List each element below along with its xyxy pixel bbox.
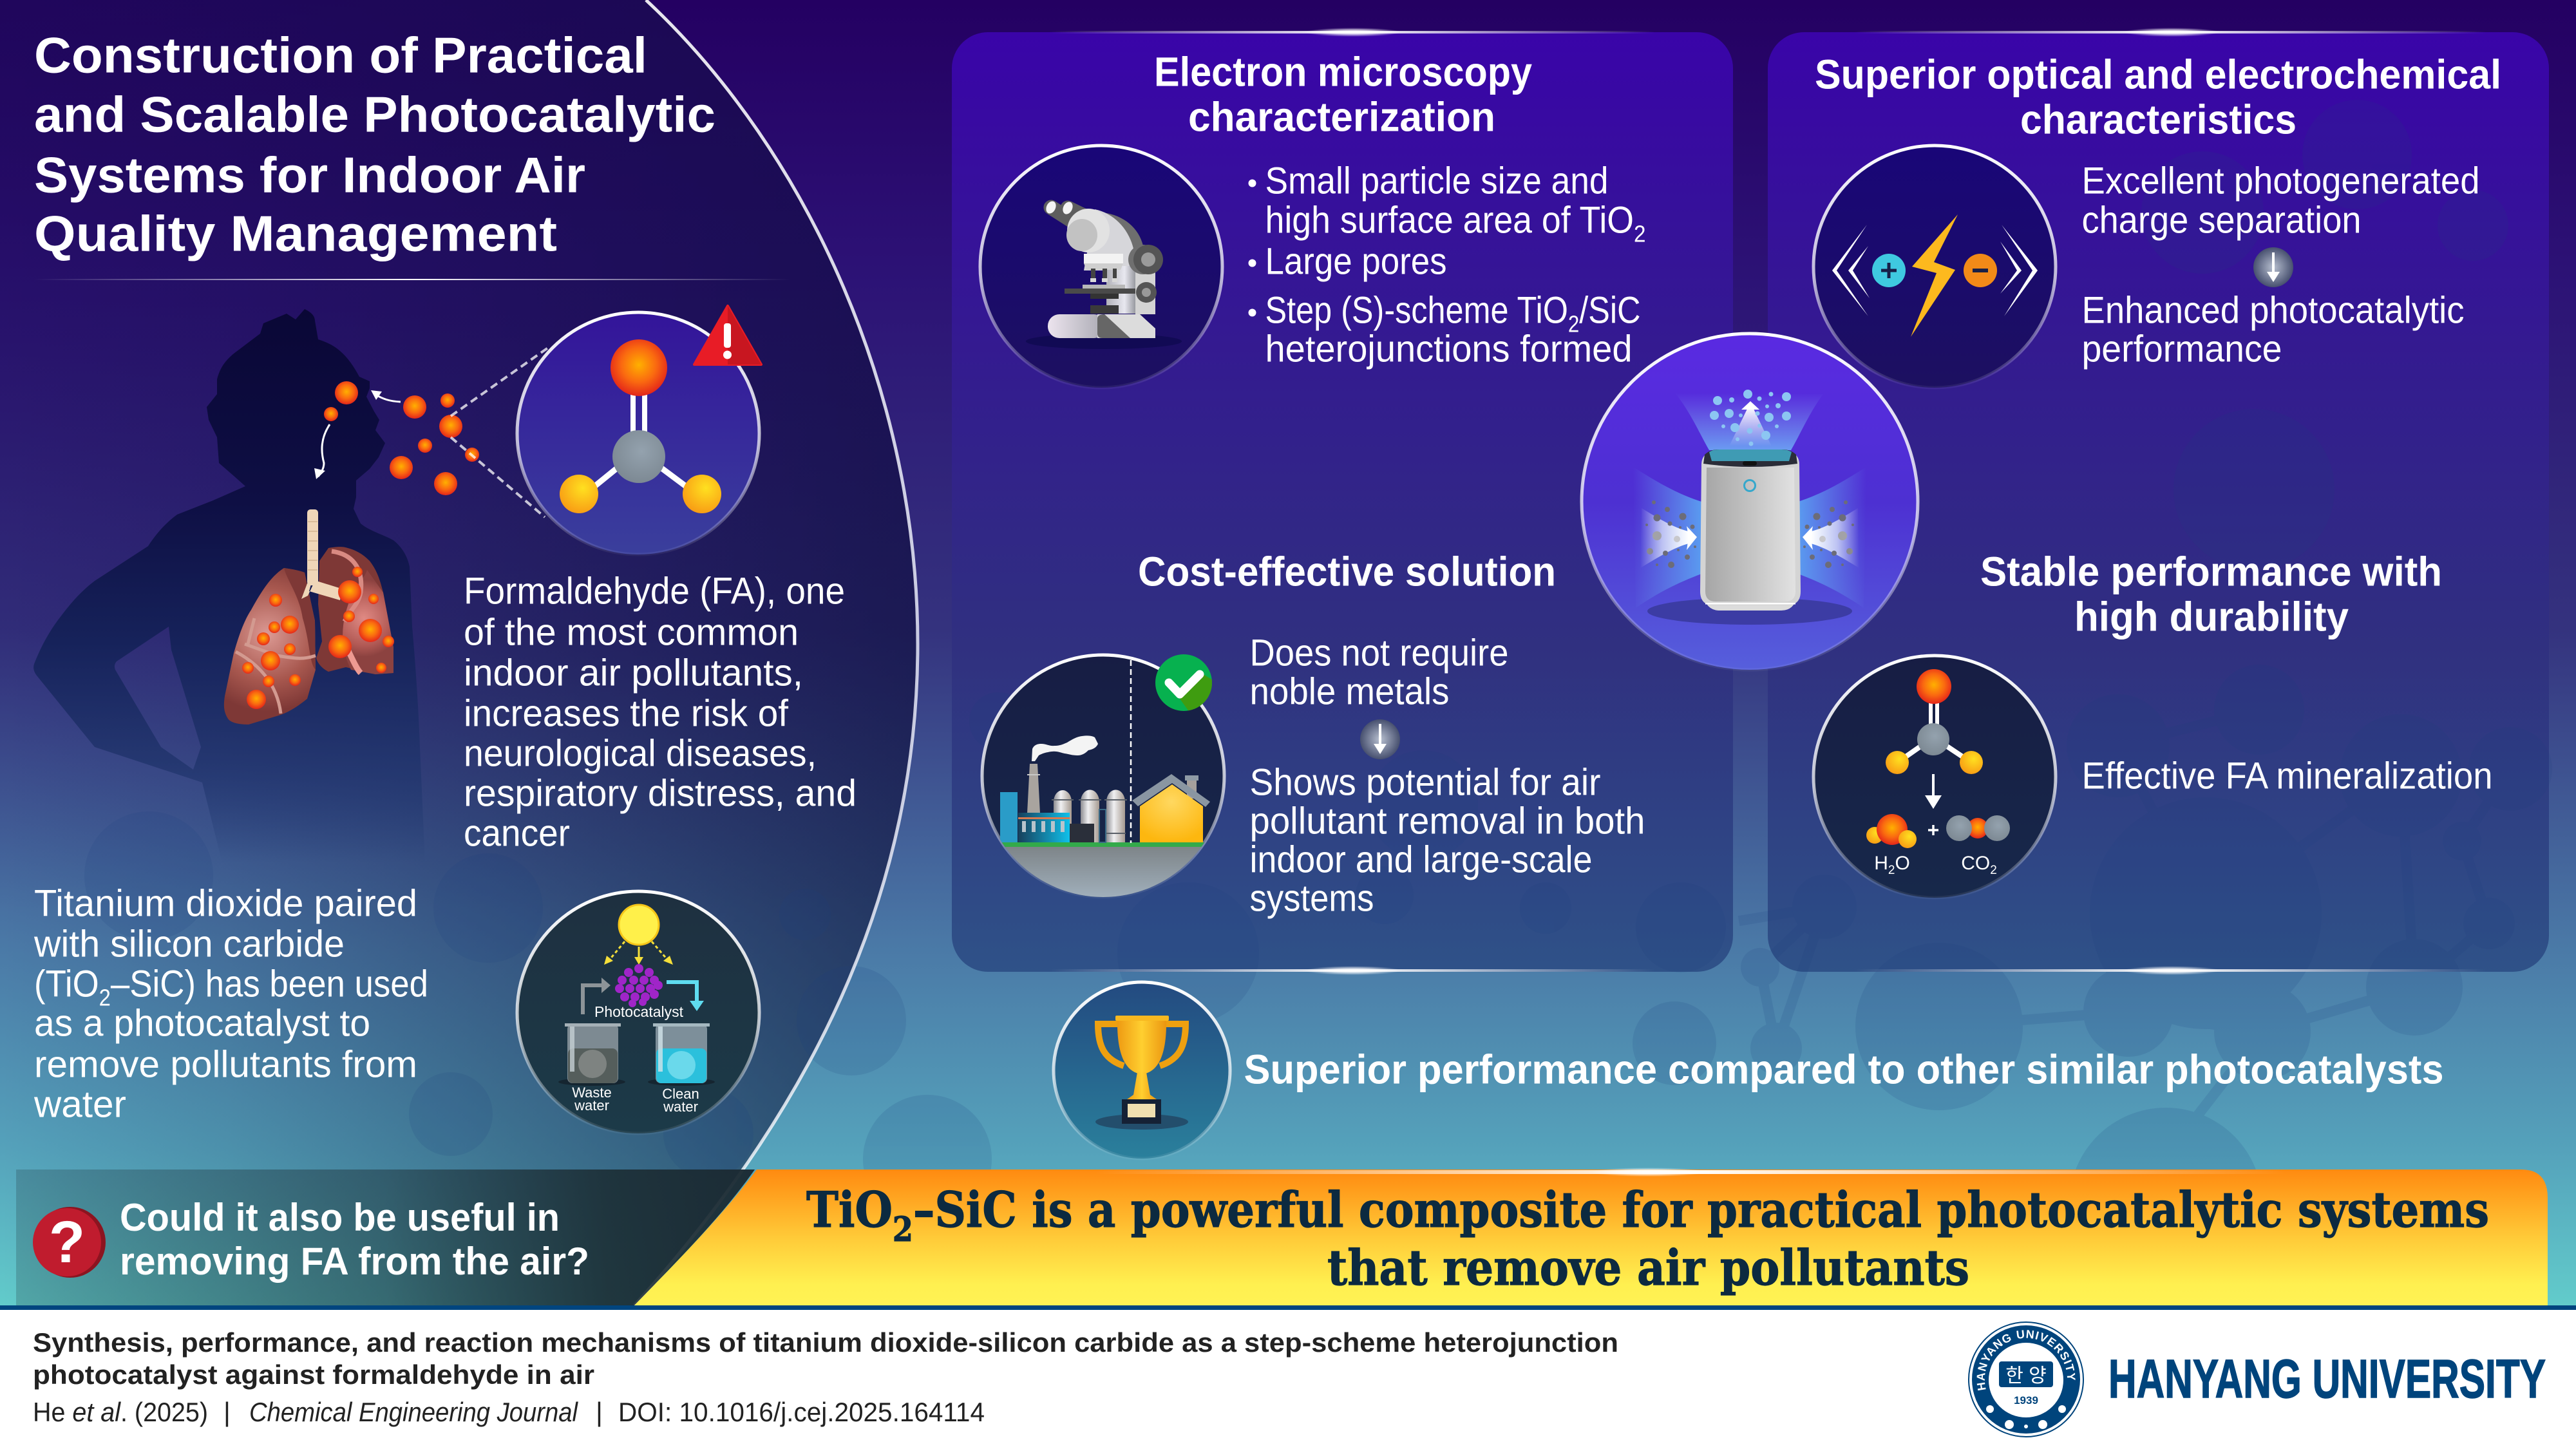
beaker labels: water bbox=[574, 1097, 609, 1113]
beaker: waste water bbox=[558, 1023, 625, 1086]
beaker labels: water bbox=[663, 1099, 698, 1115]
bullets: electron microscopy: high surface area of TiO bbox=[1265, 200, 1664, 241]
icon: FA mineralization: CO bbox=[1961, 853, 1990, 874]
title: Systems for Indoor Air bbox=[34, 147, 585, 204]
question text: Could it also be useful in bbox=[120, 1196, 560, 1239]
title: and Scalable Photocatalytic bbox=[34, 86, 715, 143]
icon: air purifier circle bbox=[1582, 334, 1918, 670]
conclusion text bbox=[806, 1181, 2489, 1296]
icon: FA mineralization: H bbox=[1874, 853, 1888, 874]
text: charge separation: charge separation bbox=[2081, 200, 2361, 241]
citation: photocatalyst against formaldehyde in air bbox=[33, 1359, 594, 1390]
text block: titanium dioxide: water bbox=[33, 1083, 126, 1126]
heading: electron microscopy bbox=[1154, 49, 1532, 140]
title bbox=[34, 27, 715, 261]
banner glow line bbox=[1095, 1168, 2286, 1177]
text block: formaldehyde: respiratory distress, and bbox=[464, 773, 857, 814]
bullets: electron microscopy: heterojunctions formed bbox=[1265, 328, 1632, 370]
panel: top left bbox=[952, 32, 1733, 972]
citation: Synthesis, performance, and reaction mechanisms of titanium dioxide-silicon carbide as a step-scheme heterojunction bbox=[33, 1327, 1618, 1358]
citation bbox=[33, 1327, 1618, 1427]
icon: FA mineralization: O bbox=[1895, 853, 1910, 874]
text block: titanium dioxide: –SiC) has been used bbox=[111, 963, 428, 1005]
illustration: person inhaling formaldehyde with lungs bbox=[33, 309, 548, 863]
panel glow lines bbox=[1050, 28, 2486, 975]
text block: formaldehyde: neurological diseases, bbox=[464, 733, 817, 774]
heading: stable performance: high durability bbox=[2074, 594, 2349, 640]
icon: question mark: ? bbox=[49, 1209, 85, 1275]
text block: formaldehyde: increases the risk of bbox=[464, 693, 789, 734]
icon: factory and house bbox=[980, 653, 1226, 899]
conclusion text: that remove air pollutants bbox=[1327, 1239, 1969, 1296]
text: charge separation: performance bbox=[2081, 328, 2282, 370]
heading: superior optical bbox=[1815, 52, 2501, 143]
text: cost-effective: indoor and large-scale bbox=[1249, 838, 1592, 881]
panel dividers bbox=[952, 501, 2512, 504]
text: cost-effective bbox=[1249, 632, 1645, 920]
bullets: electron microscopy bbox=[1248, 160, 1646, 370]
text block: titanium dioxide: 2 bbox=[99, 984, 111, 1011]
airflow wings bbox=[1633, 467, 1701, 608]
text block: titanium dioxide: with silicon carbide bbox=[33, 923, 345, 965]
conclusion banner bbox=[634, 1170, 2548, 1305]
dirty air left bbox=[1640, 500, 1697, 568]
text: charge separation: Excellent photogenerated bbox=[2081, 160, 2479, 202]
panel: top right bbox=[1768, 32, 2549, 972]
icon: FA mineralization: 2 bbox=[1990, 864, 1997, 877]
text: charge separation bbox=[2081, 160, 2479, 370]
beaker labels bbox=[572, 1084, 699, 1115]
title divider bbox=[33, 279, 790, 280]
beaker labels: Waste bbox=[572, 1084, 612, 1101]
heading: stable performance bbox=[1980, 549, 2442, 640]
heading: electron microscopy: characterization bbox=[1188, 94, 1495, 140]
icon: photocatalyst water treatment circle bbox=[517, 891, 759, 1133]
dirty air right bbox=[1803, 500, 1859, 568]
citation: He et al. (2025) bbox=[33, 1397, 208, 1427]
zoom lines to molecule bbox=[451, 348, 548, 517]
heading: superior optical: Superior optical and electrochemical bbox=[1815, 52, 2501, 98]
icon: FA mineralization bbox=[1814, 656, 2056, 898]
text block: formaldehyde: of the most common bbox=[464, 612, 799, 653]
beaker labels: Clean bbox=[662, 1086, 699, 1102]
icon: question mark bbox=[33, 1207, 106, 1278]
citation: DOI: 10.1016/j.cej.2025.164114 bbox=[618, 1397, 985, 1427]
catalyst cluster bbox=[615, 964, 663, 1007]
icon: microscope bbox=[980, 146, 1222, 388]
text block: titanium dioxide: (TiO bbox=[34, 963, 106, 1005]
text block: titanium dioxide: as a photocatalyst to bbox=[34, 1002, 370, 1045]
question text bbox=[120, 1196, 589, 1283]
footer bbox=[0, 1305, 2576, 1437]
silhouette bbox=[33, 309, 425, 863]
icon: charge separation bbox=[1814, 146, 2056, 388]
title: Quality Management bbox=[34, 205, 557, 261]
icon: FA mineralization: 2 bbox=[1888, 864, 1895, 877]
heading: cost-effective: Cost-effective solution bbox=[1138, 549, 1556, 595]
left dark curved panel bbox=[0, 0, 921, 1307]
icon: green check bbox=[1155, 654, 1212, 711]
conclusion text: 2 bbox=[893, 1210, 913, 1249]
beaker: clean water bbox=[648, 1023, 715, 1086]
text block: formaldehyde bbox=[464, 571, 857, 854]
text: cost-effective: noble metals bbox=[1249, 671, 1449, 712]
text: cost-effective: systems bbox=[1249, 877, 1374, 920]
bullets: electron microscopy: 2 bbox=[1568, 310, 1579, 337]
pollutant particles in lungs bbox=[242, 567, 394, 709]
bullets: electron microscopy: Step (S)-scheme TiO bbox=[1265, 290, 1614, 331]
icon: photocatalyst water treatment circle: Photocatalyst bbox=[594, 1003, 684, 1020]
title: Construction of Practical bbox=[34, 27, 647, 84]
text block: formaldehyde: indoor air pollutants, bbox=[464, 652, 803, 694]
conclusion text: TiO bbox=[806, 1181, 904, 1238]
logo seal: 한 양 bbox=[2005, 1365, 2047, 1387]
lungs bbox=[224, 509, 393, 724]
sun bbox=[619, 905, 659, 945]
text: charge separation: Enhanced photocatalytic bbox=[2081, 290, 2464, 331]
process arrows bbox=[583, 985, 602, 1014]
icon: down arrow bbox=[2253, 247, 2293, 287]
bullets: electron microscopy: Small particle size and bbox=[1265, 160, 1609, 202]
icon: warning triangle bbox=[694, 306, 761, 365]
light arrows bbox=[604, 942, 673, 965]
logo seal: 1939 bbox=[2014, 1394, 2038, 1406]
citation: | bbox=[223, 1397, 231, 1427]
airborne formaldehyde particles bbox=[324, 381, 479, 495]
bullets: electron microscopy: /SiC bbox=[1579, 290, 1641, 331]
citation: | bbox=[596, 1397, 603, 1427]
left curve line bbox=[634, 0, 918, 1305]
text: FA mineralization: Effective FA mineralization bbox=[2081, 755, 2492, 797]
logo seal: HANYANG UNIVERSITY bbox=[1977, 1330, 2076, 1391]
text block: titanium dioxide: Titanium dioxide paired bbox=[34, 882, 417, 925]
text block: titanium dioxide: remove pollutants from bbox=[34, 1043, 417, 1086]
clean air arrow and droplets bbox=[1710, 390, 1791, 446]
icon: down arrow bbox=[1360, 719, 1400, 759]
text: cost-effective: pollutant removal in both bbox=[1249, 800, 1645, 842]
bullets: electron microscopy: 2 bbox=[1634, 220, 1646, 247]
text block: formaldehyde: cancer bbox=[464, 813, 570, 854]
question banner bbox=[16, 1170, 755, 1305]
inhalation arrows bbox=[314, 390, 401, 479]
heading: electron microscopy: Electron microscopy bbox=[1154, 49, 1532, 95]
shadow bbox=[1647, 598, 1852, 625]
text block: formaldehyde: Formaldehyde (FA), one bbox=[464, 571, 845, 612]
text: superior performance: Superior performance compared to other similar photocatalysts bbox=[1244, 1046, 2443, 1092]
background molecule pattern bbox=[84, 100, 2552, 1301]
icon: trophy bbox=[1054, 982, 1230, 1159]
question text: removing FA from the air? bbox=[120, 1240, 589, 1283]
bullets: electron microscopy: Large pores bbox=[1265, 241, 1446, 282]
text block: titanium dioxide bbox=[33, 882, 428, 1126]
icon: formaldehyde molecule circle bbox=[517, 312, 759, 554]
logo seal bbox=[1968, 1321, 2084, 1437]
purifier body bbox=[1700, 450, 1801, 611]
heading: stable performance: Stable performance with bbox=[1980, 549, 2442, 595]
text: cost-effective: Does not require bbox=[1249, 632, 1508, 674]
citation: Chemical Engineering Journal bbox=[249, 1397, 579, 1427]
text: cost-effective: Shows potential for air bbox=[1249, 761, 1601, 804]
heading: superior optical: characteristics bbox=[2020, 97, 2297, 143]
